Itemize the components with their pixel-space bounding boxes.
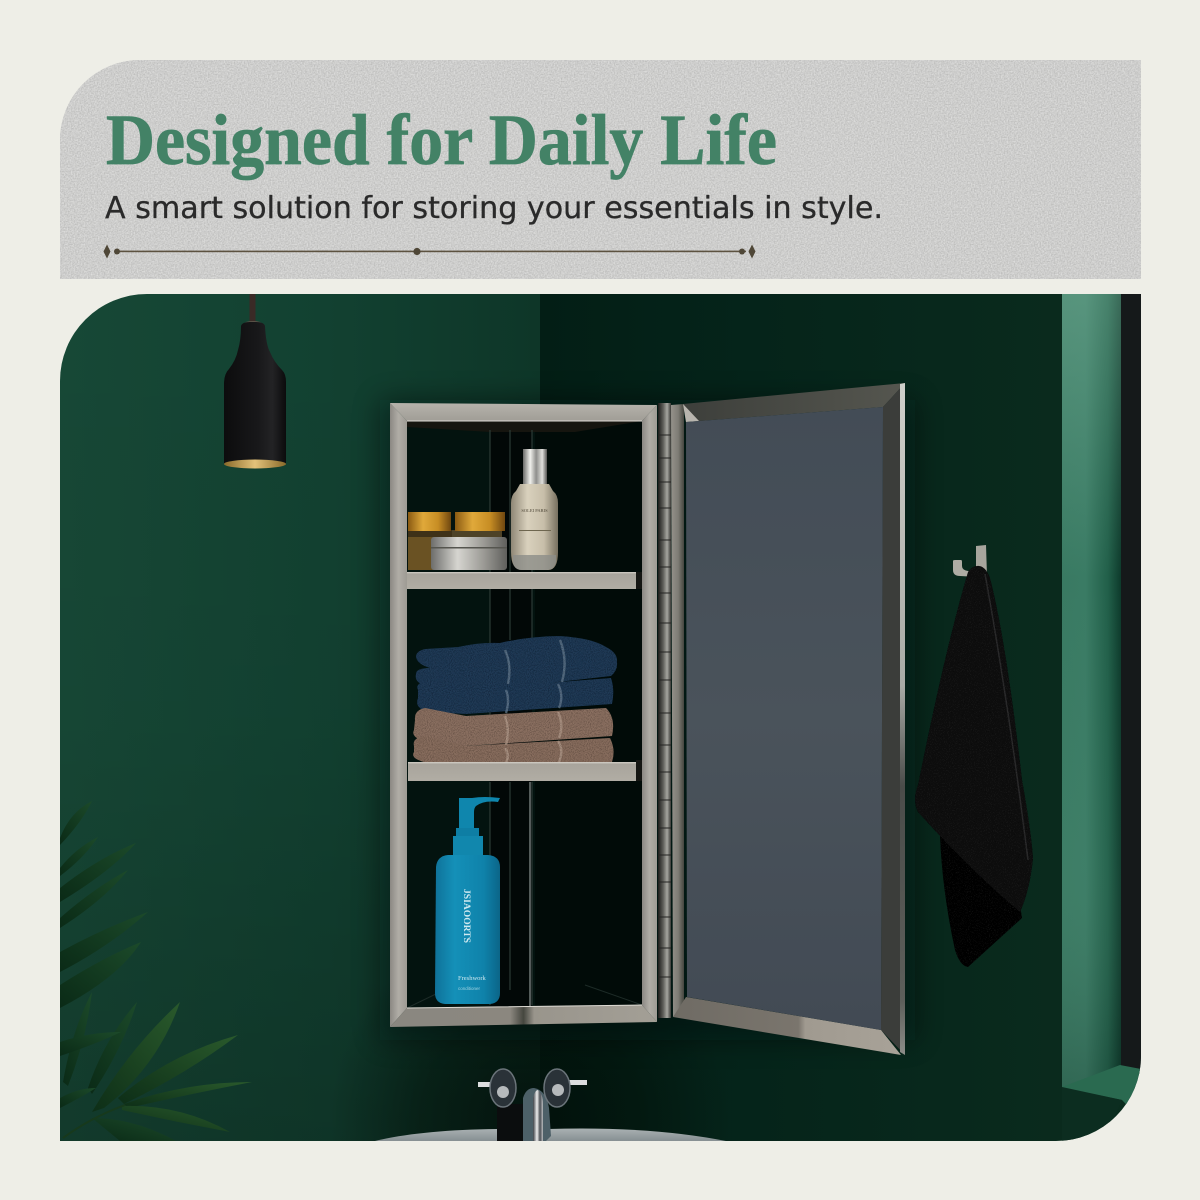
blue pump bottle	[435, 797, 500, 1004]
shade behind sink	[374, 1024, 644, 1140]
bright door edge	[900, 383, 905, 1055]
pendant lamp	[224, 294, 286, 468]
blue pump bottle: conditioner	[458, 986, 481, 991]
upper shelf	[407, 572, 642, 589]
lower shelf	[408, 760, 642, 781]
towel hook	[953, 545, 987, 577]
sink basin	[375, 1128, 726, 1141]
hanging black towel	[915, 566, 1033, 967]
blue pump bottle: Freshwork	[458, 975, 487, 982]
cabinet shadow	[380, 400, 915, 1040]
left green wall	[60, 294, 541, 1141]
subtitle: A smart solution for storing your essentials in style.	[105, 191, 883, 226]
cabinet frame	[390, 403, 657, 1027]
serum bottle	[511, 449, 558, 570]
palm plant	[60, 801, 252, 1141]
green wall niche	[1062, 294, 1141, 1141]
ornamental divider	[104, 244, 756, 258]
bottle label: SOLEI PARIS	[521, 508, 548, 513]
hinge	[658, 403, 671, 1018]
cabinet interior	[407, 421, 642, 1011]
bottle text: JSIAOORTS	[461, 889, 471, 943]
corner cabinet	[390, 383, 905, 1055]
title: Designed for Daily Life	[106, 100, 777, 180]
right green wall	[540, 294, 1141, 1141]
folded towels	[413, 636, 617, 764]
panel: bathroom photo scene	[60, 294, 1141, 1141]
panel: header	[60, 60, 1141, 279]
open mirror door	[671, 383, 905, 1055]
jars	[408, 512, 507, 570]
mirror glass	[686, 407, 883, 1030]
faucet	[478, 1069, 587, 1141]
